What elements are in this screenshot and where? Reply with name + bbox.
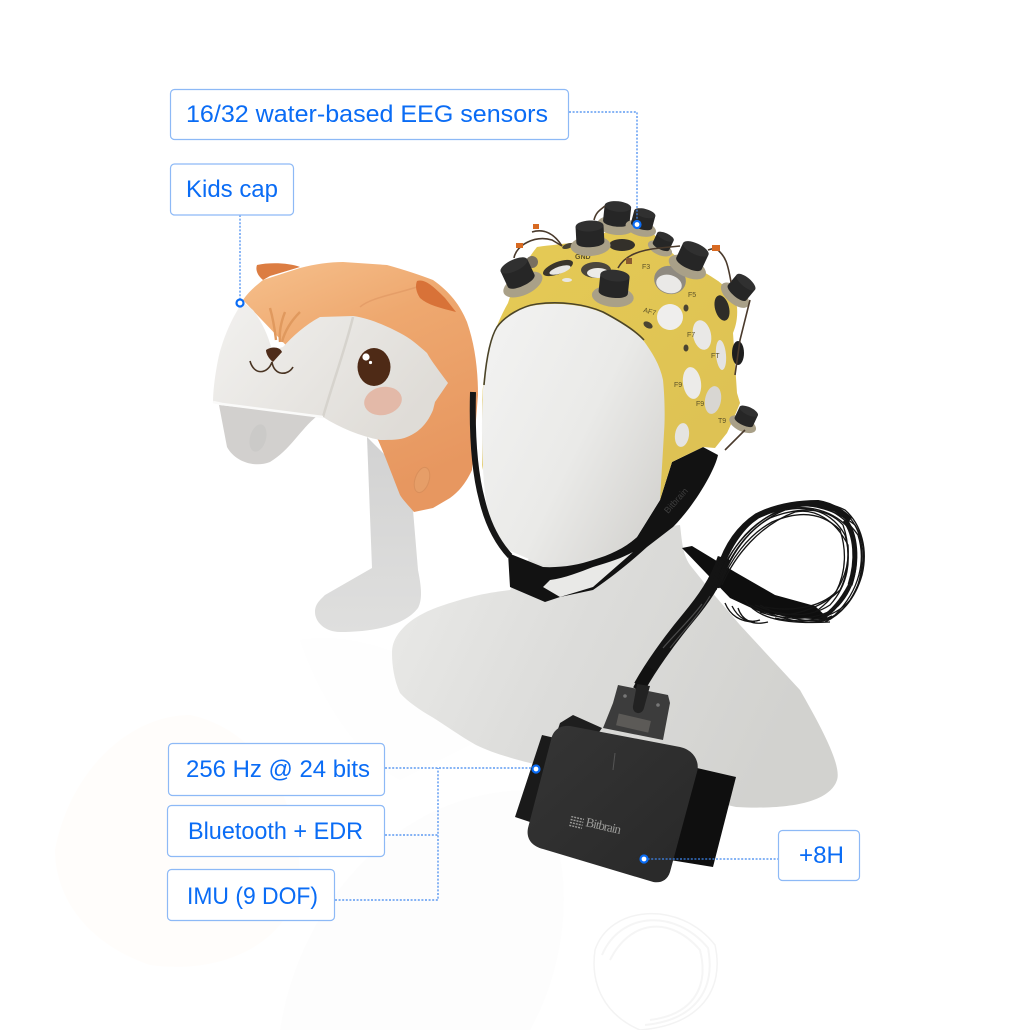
sensor wires [514,206,750,450]
cap edge [484,303,644,385]
logo text: Bitbrain [584,814,623,837]
callout: IMU (9 DOF): IMU (9 DOF) [187,883,318,910]
orange shell [243,262,478,512]
stand [315,437,421,632]
cable bundle [640,503,864,686]
forehead stripes [270,308,300,342]
callout: IMU (9 DOF) [168,870,334,920]
cap labels: F5 [688,292,696,299]
connector: device specs [335,766,540,900]
amplifier device [515,684,736,882]
callout: 16/32 water-based EEG sensors: 16/32 water-based EEG sensors [186,101,548,128]
callout: Bluetooth + EDR: Bluetooth + EDR [188,818,363,845]
eye [358,348,390,386]
nose [266,348,282,362]
mouth [250,361,293,373]
adult mannequin with cap [392,199,864,808]
callout: Kids cap [170,164,294,306]
faint reflection [55,638,717,1030]
connector [603,685,670,740]
callout: Bluetooth + EDR [168,806,384,856]
status light [613,753,615,770]
cap labels [575,254,726,425]
callout: +8H: +8H [799,842,844,869]
yellow cap [482,225,740,500]
cap labels: AF7 [642,307,657,317]
white face [213,302,448,440]
cap labels: T9 [718,418,726,425]
cap holes [526,239,732,448]
buckle [555,715,602,745]
cap labels: F7 [687,332,695,339]
cap labels: F9 [674,382,682,389]
logo mark [569,817,584,828]
callout: 256 Hz @ 24 bits: 256 Hz @ 24 bits [186,756,370,783]
callout: Kids cap: Kids cap [186,176,278,203]
callout: 16/32 water-based EEG sensors [170,90,640,228]
left strap [473,392,510,556]
chin strap gap [543,552,633,597]
face [482,304,665,565]
bust [392,525,838,808]
device body [528,726,698,882]
sensors [493,199,763,437]
kids cap fox mannequin [213,262,478,632]
ears [256,263,300,280]
cap labels: F3 [642,264,650,271]
cable boot [638,668,650,690]
inner chin flap [219,405,317,464]
left strap band [515,735,555,822]
right strap [508,447,718,602]
seams [323,317,353,417]
ear hole [247,422,269,454]
cap labels: GND [575,254,591,261]
blush [362,383,404,419]
strap logo: Bitbrain [662,486,690,515]
cap labels: FT [711,353,720,360]
cap labels: F9 [696,401,704,408]
callout: +8H [640,830,860,880]
right strap band [670,768,736,867]
callout: 256 Hz @ 24 bits [168,744,384,796]
cheek hole [411,465,433,495]
